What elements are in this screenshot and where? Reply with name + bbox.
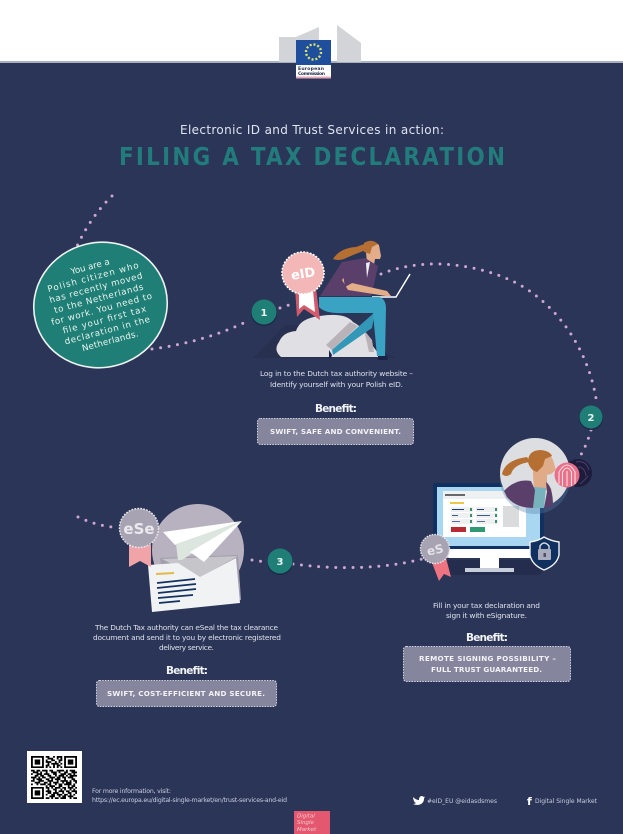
- arm: [342, 273, 391, 296]
- eID rosette: [282, 252, 324, 320]
- step 3 badge: 3: [277, 557, 284, 568]
- facebook: Digital Single Market: [535, 798, 598, 805]
- twitter: #eID_EU @eidasdsmes: [427, 798, 497, 805]
- shield icon: [530, 537, 559, 570]
- grey circle: [152, 504, 244, 596]
- fingerprint: [554, 459, 592, 488]
- step 3 benefit box: [96, 680, 276, 706]
- step 3 benefit heading: Benefit:: [166, 665, 208, 677]
- step 2 badge: 2: [588, 413, 595, 424]
- step 2 illustration: computer: [433, 483, 550, 575]
- cloud: [276, 315, 381, 357]
- envelope front: [148, 558, 240, 612]
- step 2 benefit box: REMOTE SIGNING POSSIBILITY –: [419, 654, 556, 663]
- intro text: has recently moved: [48, 271, 144, 306]
- step 2 text: [433, 601, 540, 620]
- step 1 benefit heading: Benefit:: [315, 403, 357, 415]
- eSe rosette: [120, 508, 158, 567]
- step 3 illustration: envelope and paper plane: [148, 504, 244, 612]
- facebook: [527, 795, 598, 808]
- Digital Single Market tag: Market: [297, 827, 317, 833]
- eSe rosette: eSe: [123, 520, 155, 538]
- header band: [0, 0, 623, 63]
- head: [364, 242, 381, 265]
- back leg: [332, 312, 375, 355]
- step 1 text: Identify yourself with your Polish eID.: [270, 380, 403, 389]
- eS rosette: [420, 534, 451, 581]
- Digital Single Market tag: [294, 811, 330, 834]
- step 1 benefit box: SWIFT, SAFE AND CONVENIENT.: [270, 427, 401, 436]
- more information: [92, 788, 287, 804]
- intro text: You are a: [69, 257, 111, 278]
- laptop: [372, 274, 410, 297]
- step 2 benefit box: [404, 646, 570, 682]
- portrait jacket: [504, 480, 535, 508]
- step 3 text: [93, 623, 281, 652]
- intro text: declaration in the: [64, 315, 151, 347]
- step 3 badge: [267, 548, 293, 575]
- more information: For more information, visit:: [92, 788, 171, 795]
- title: [119, 123, 505, 171]
- subtitle: Electronic ID and Trust Services in action:: [180, 123, 444, 137]
- intro text: Netherlands.: [81, 329, 140, 354]
- step 1 badge: 1: [261, 308, 268, 319]
- step 2 badge: [579, 406, 603, 430]
- step 1 badge: [251, 300, 277, 326]
- QR code: [27, 751, 82, 803]
- portrait hair: [528, 450, 552, 472]
- Digital Single Market tag: Single: [297, 820, 315, 826]
- step 3 text: delivery service.: [159, 643, 214, 652]
- portrait shirt: [533, 487, 546, 508]
- portrait neck and face: [533, 455, 556, 490]
- more information: https://ec.europa.eu/digital-single-market/en/trust-services-and-eid: [92, 797, 287, 804]
- intro text: [39, 249, 162, 360]
- front leg: [319, 297, 386, 356]
- eID rosette: eID: [290, 265, 317, 284]
- step 2 text: sign it with eSignature.: [446, 611, 527, 620]
- Digital Single Market tag: Digital: [297, 814, 315, 820]
- cloud shadow: [253, 325, 395, 358]
- step 1 text: [260, 369, 413, 389]
- main heading: FILING A TAX DECLARATION: [119, 144, 505, 171]
- portrait ponytail: [502, 457, 530, 476]
- screen: [437, 487, 540, 546]
- step 1 text: Log in to the Dutch tax authority website –: [260, 369, 413, 378]
- portrait circle: [500, 438, 570, 514]
- logo: European Commission: European: [298, 66, 324, 72]
- step 2 benefit box: FULL TRUST GUARANTEED.: [431, 665, 542, 674]
- intro circle: [20, 228, 181, 382]
- step 3 text: document and send it to you by electronic registered: [93, 633, 281, 642]
- eS rosette: eS: [426, 541, 445, 559]
- intro text: to the Netherlands: [53, 282, 145, 316]
- step 1 benefit box: [258, 418, 414, 444]
- envelope back: [160, 555, 241, 600]
- intro text: file your first tax: [62, 305, 147, 336]
- monitor shadow: [440, 560, 550, 575]
- step 1 illustration: woman on a cloud: [253, 241, 410, 360]
- step 3 benefit box: SWIFT, COST-EFFICIENT AND SECURE.: [107, 689, 265, 698]
- logo: European Commission: Commission: [298, 71, 325, 77]
- form on screen: [443, 491, 526, 537]
- paper plane: [163, 521, 242, 562]
- monitor chin and stand: [437, 549, 540, 569]
- monitor frame: [433, 483, 544, 549]
- intro text: Polish citizen who: [47, 261, 140, 295]
- icon: facebook f: f: [527, 795, 532, 808]
- step 2 text: Fill in your tax declaration and: [433, 601, 540, 610]
- torso: [320, 258, 378, 296]
- dotted journey path: [77, 196, 597, 568]
- icon: twitter bird: [413, 796, 425, 805]
- twitter: [413, 796, 497, 805]
- step 2 benefit heading: Benefit:: [466, 632, 508, 644]
- step 3 text: The Dutch Tax authority can eSeal the tax clearance: [94, 623, 278, 632]
- ponytail: [333, 243, 367, 260]
- intro text: for work. You need to: [50, 292, 153, 328]
- envelope flap: [162, 556, 238, 578]
- logo: European Commission: [279, 25, 361, 78]
- envelope lines: [156, 572, 196, 603]
